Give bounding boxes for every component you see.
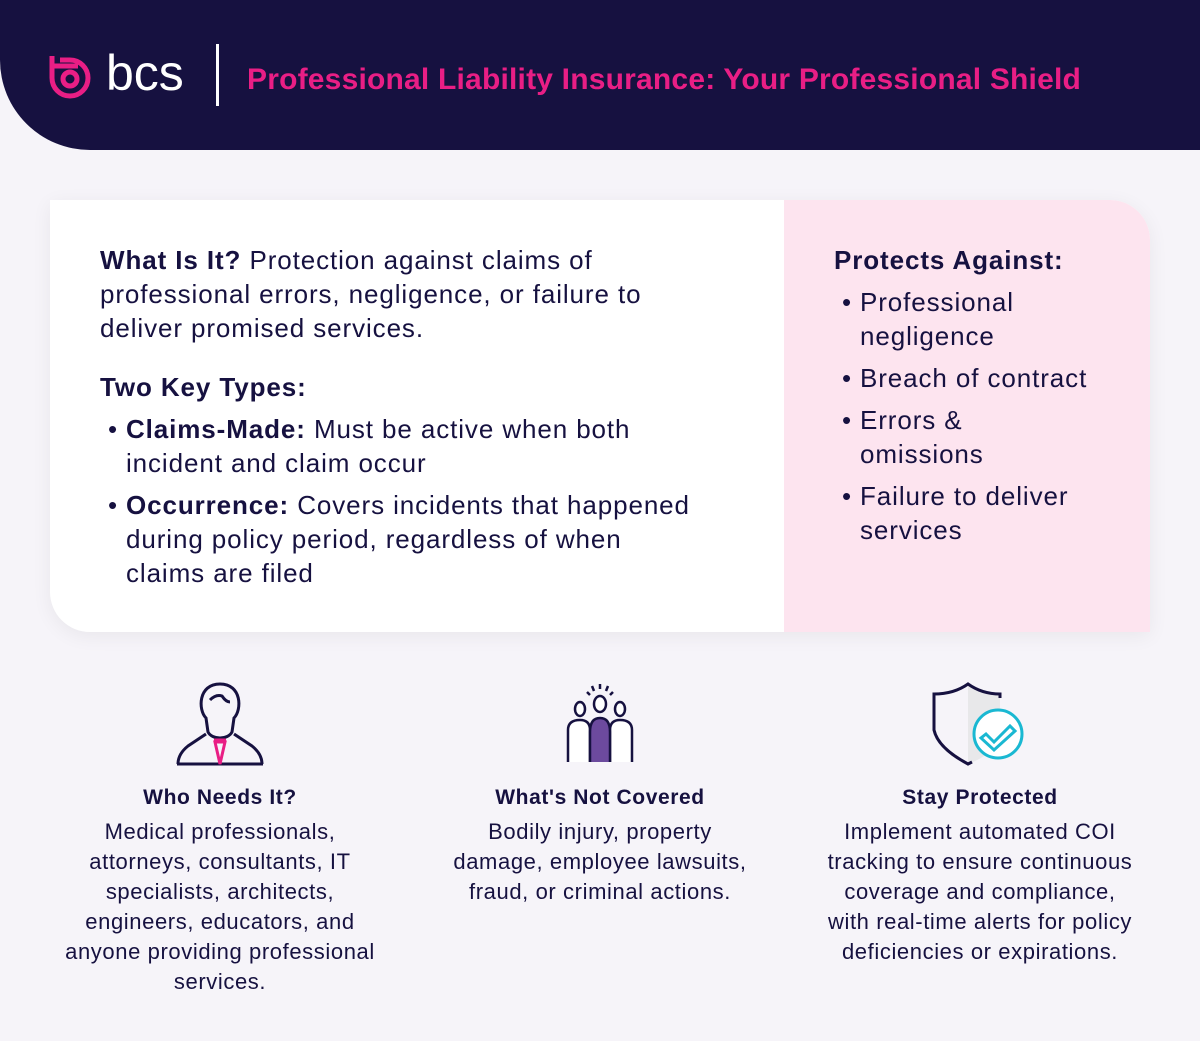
- column: stay protected: coverage and compliance,: [844, 879, 1116, 904]
- text: two key types: claims are filed: [126, 558, 314, 588]
- panel: protects against: omissions: [860, 439, 984, 469]
- column: stay protected: tracking to ensure continuous: [828, 849, 1132, 874]
- column: stay protected: deficiencies or expirations.: [842, 939, 1118, 964]
- panel: protects against: services: [860, 515, 963, 545]
- icon: person: [176, 682, 264, 766]
- column: stay protected: Implement automated COI: [844, 819, 1116, 844]
- text: two key types: incident and claim occur: [126, 448, 427, 478]
- text: what is it: professional errors, negligence, or failure to: [100, 279, 641, 309]
- column: not covered: What's Not Covered: [495, 786, 705, 809]
- main card: [50, 200, 1150, 632]
- column: who needs it: [65, 786, 375, 994]
- title: Professional Liability Insurance: Your Professional Shield: [247, 63, 1081, 96]
- column: who needs it: services.: [174, 969, 266, 994]
- panel: protects against: negligence: [860, 321, 995, 351]
- column: who needs it: Who Needs It?: [143, 786, 297, 809]
- logo: bcs: [106, 45, 184, 101]
- text: what is it: [100, 245, 641, 343]
- text: two key types: Two Key Types:: [100, 372, 307, 402]
- column: not covered: damage, employee lawsuits,: [453, 849, 747, 874]
- column: stay protected: Stay Protected: [902, 786, 1058, 809]
- column: who needs it: specialists, architects,: [106, 879, 334, 904]
- panel: protects against: Errors &: [860, 405, 963, 435]
- column: not covered: Bodily injury, property: [488, 819, 712, 844]
- header bar: [0, 0, 1200, 150]
- panel: protects against: Protects Against:: [834, 245, 1064, 275]
- text: two key types: Occurrence: Covers incidents that happened: [126, 490, 690, 520]
- panel: protects against: Breach of contract: [860, 363, 1087, 393]
- column: stay protected: [828, 786, 1132, 964]
- text: what is it: What Is It? Protection against claims of: [100, 245, 593, 275]
- text: two key types: [100, 372, 690, 588]
- column: who needs it: attorneys, consultants, IT: [89, 849, 351, 874]
- logo: [50, 45, 184, 101]
- panel: protects against: [784, 200, 1150, 632]
- text: two key types: Claims-Made: Must be active when both: [126, 414, 630, 444]
- text: what is it: deliver promised services.: [100, 313, 424, 343]
- panel: protects against: Failure to deliver: [860, 481, 1068, 511]
- column: who needs it: Medical professionals,: [105, 819, 335, 844]
- column: not covered: fraud, or criminal actions.: [469, 879, 731, 904]
- column: who needs it: engineers, educators, and: [85, 909, 355, 934]
- column: who needs it: anyone providing professional: [65, 939, 375, 964]
- column: stay protected: with real-time alerts for policy: [828, 909, 1132, 934]
- text: two key types: during policy period, regardless of when: [126, 524, 622, 554]
- icon: group: [566, 684, 634, 762]
- column: not covered: [453, 786, 747, 904]
- icon: shield: [932, 682, 1024, 766]
- panel: protects against: Professional: [860, 287, 1014, 317]
